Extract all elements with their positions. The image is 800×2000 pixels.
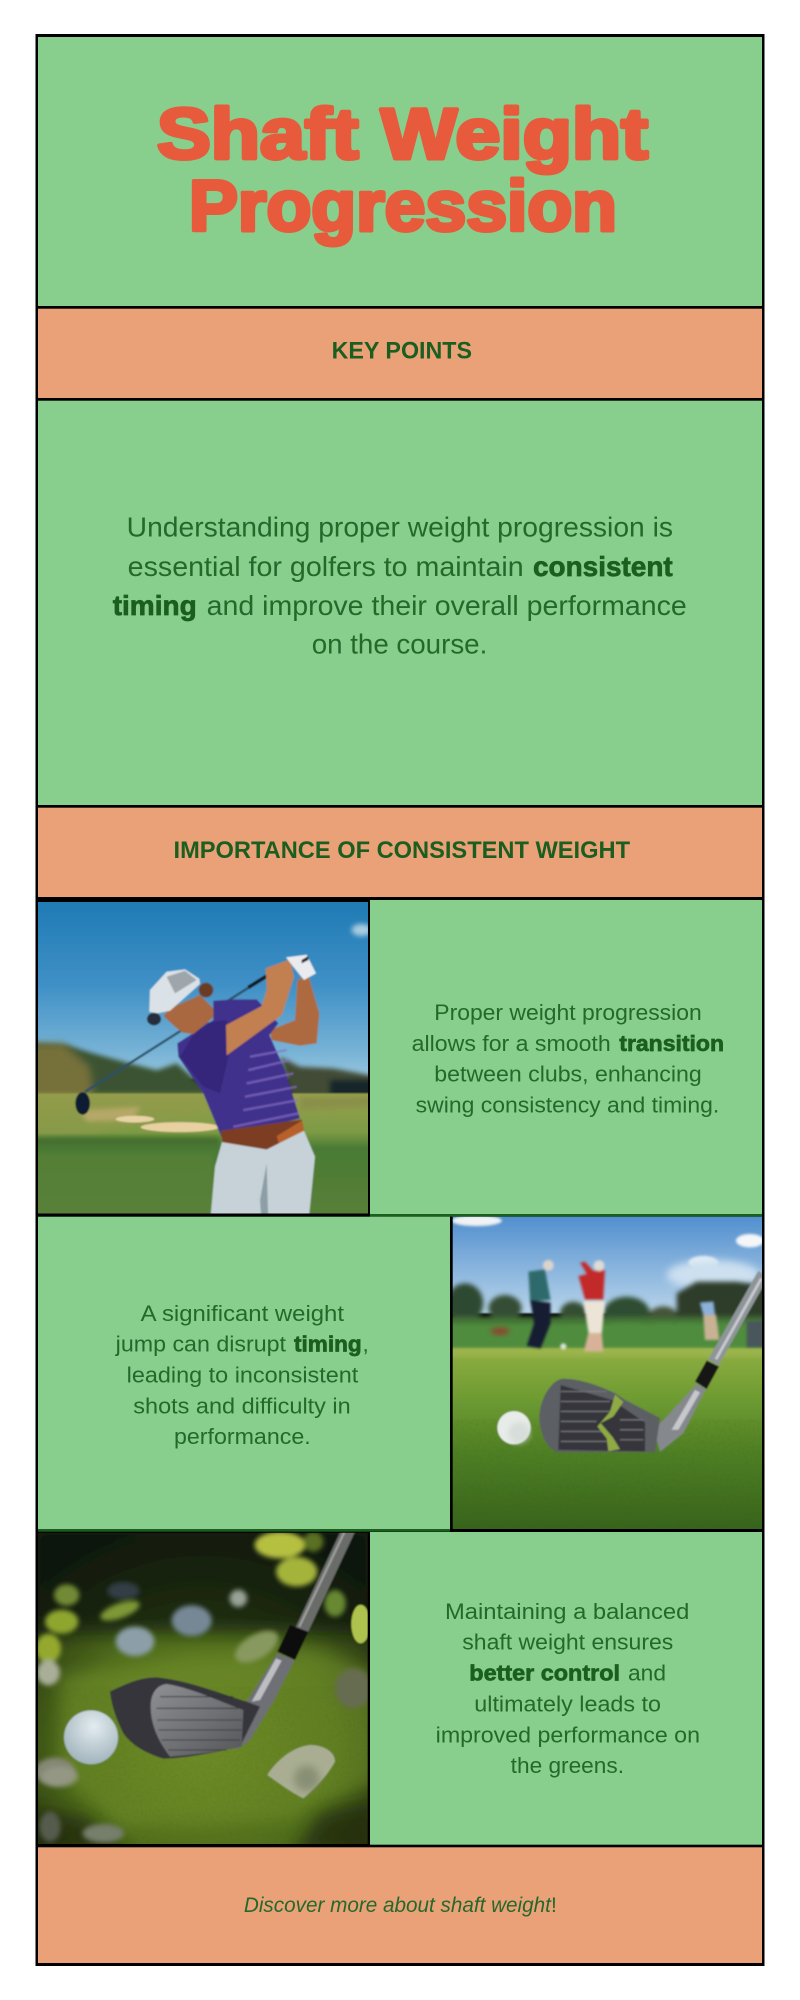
photo: iron club beside ball with leaves <box>38 1532 368 1844</box>
panel: key points text: consistent <box>533 551 673 582</box>
panel: control text: improved performance on <box>436 1722 700 1747</box>
panel: transition text: allows for a smooth <box>412 1031 611 1056</box>
panel: key points text: and improve their overall performance <box>207 590 687 621</box>
panel: key points text <box>38 401 762 805</box>
panel: control text: Maintaining a balanced <box>445 1599 689 1624</box>
panel: control text: ultimately leads to <box>474 1691 661 1716</box>
panel: transition text: between clubs, enhancing <box>434 1062 702 1087</box>
panel: key points text: timing <box>113 590 197 621</box>
panel: timing text: shots and difficulty in <box>133 1393 351 1418</box>
panel: timing text: A significant weight <box>141 1301 345 1326</box>
panel: key points heading: KEY POINTS <box>332 338 472 365</box>
panel: timing text: leading to inconsistent <box>127 1363 359 1388</box>
panel: importance heading <box>38 808 762 897</box>
photo: golfer mid-swing on fairway <box>38 902 368 1214</box>
panel: control text: the greens. <box>511 1753 624 1778</box>
panel: control text: better control <box>469 1661 620 1686</box>
panel: timing text: timing <box>294 1332 362 1357</box>
title: Progression <box>189 168 617 246</box>
photo: cracked iron club and ball on green <box>452 1216 762 1529</box>
panel: title <box>38 37 762 306</box>
panel: transition text <box>370 900 762 1217</box>
panel: transition text: Proper weight progression <box>434 1000 702 1025</box>
panel: key points text: Understanding proper weight progression is <box>127 512 673 543</box>
panel: control text <box>370 1532 762 1845</box>
title: Shaft Weight <box>157 96 648 174</box>
title <box>157 96 648 246</box>
panel: timing text <box>38 1217 450 1532</box>
panel: footer call to action: Discover more about shaft weight <box>244 1894 552 1917</box>
panel: key points text: on the course. <box>312 629 487 660</box>
panel: key points heading <box>38 309 762 398</box>
panel: transition text: swing consistency and timing. <box>416 1092 719 1117</box>
panel: footer call to action <box>38 1847 762 1963</box>
panel: control text: and <box>628 1661 666 1686</box>
panel: footer call to action: ! <box>551 1894 557 1917</box>
panel: timing text: jump can disrupt <box>115 1332 287 1357</box>
panel: control text: shaft weight ensures <box>462 1630 673 1655</box>
panel: transition text: transition <box>619 1031 724 1056</box>
panel: timing text: performance. <box>174 1424 311 1449</box>
panel: timing text: , <box>362 1332 369 1357</box>
panel: key points text: essential for golfers to maintain <box>128 551 524 582</box>
panel: importance heading: IMPORTANCE OF CONSISTENT WEIGHT <box>174 837 630 864</box>
